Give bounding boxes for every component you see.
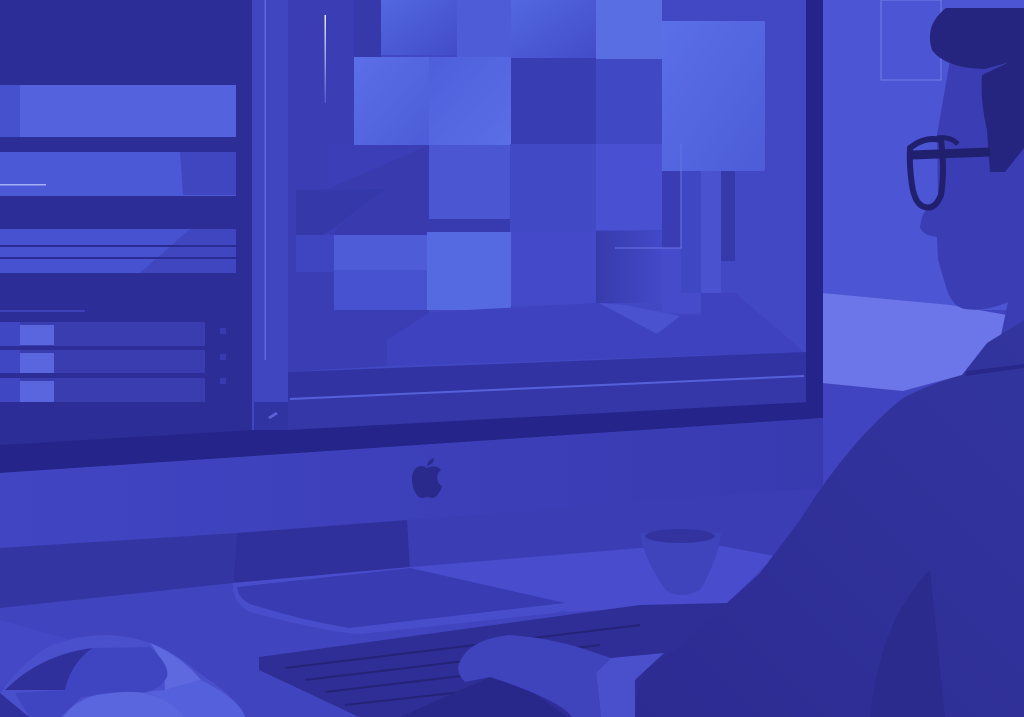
desk surface (0, 546, 775, 717)
tile mosaic (296, 0, 765, 313)
computer monitor (0, 0, 823, 608)
monitor bezel (0, 0, 823, 473)
monitor lower edge left (0, 533, 237, 608)
sidebar bar three (0, 229, 236, 273)
cuff (596, 653, 664, 717)
lower canvas shape (387, 293, 804, 366)
shirt torso (635, 320, 1024, 717)
hair (982, 55, 1024, 172)
face and neck (920, 60, 1024, 340)
cap (930, 8, 1024, 69)
coffee cup (640, 529, 721, 595)
stand base (233, 567, 567, 634)
floor highlight (822, 293, 1024, 391)
timeline strip (288, 352, 806, 398)
computer mouse (0, 635, 245, 717)
person (458, 8, 1024, 717)
sidebar bar one (0, 85, 236, 137)
icon: glasses (910, 138, 990, 208)
panel: main screen canvas (252, 0, 806, 430)
hand on keyboard (458, 635, 611, 717)
keyboard (259, 603, 727, 717)
sidebar bar two (0, 152, 236, 196)
monitor chin (0, 418, 823, 548)
monitor lower edge right (407, 488, 823, 567)
arm shadow (870, 570, 945, 717)
sidebar stacked rows (0, 310, 226, 402)
collar line (965, 364, 1024, 376)
monitor stand (233, 520, 567, 634)
icon: apple logo (412, 458, 442, 498)
panel: left sidebar of screen (0, 0, 252, 445)
stand neck (233, 520, 410, 585)
